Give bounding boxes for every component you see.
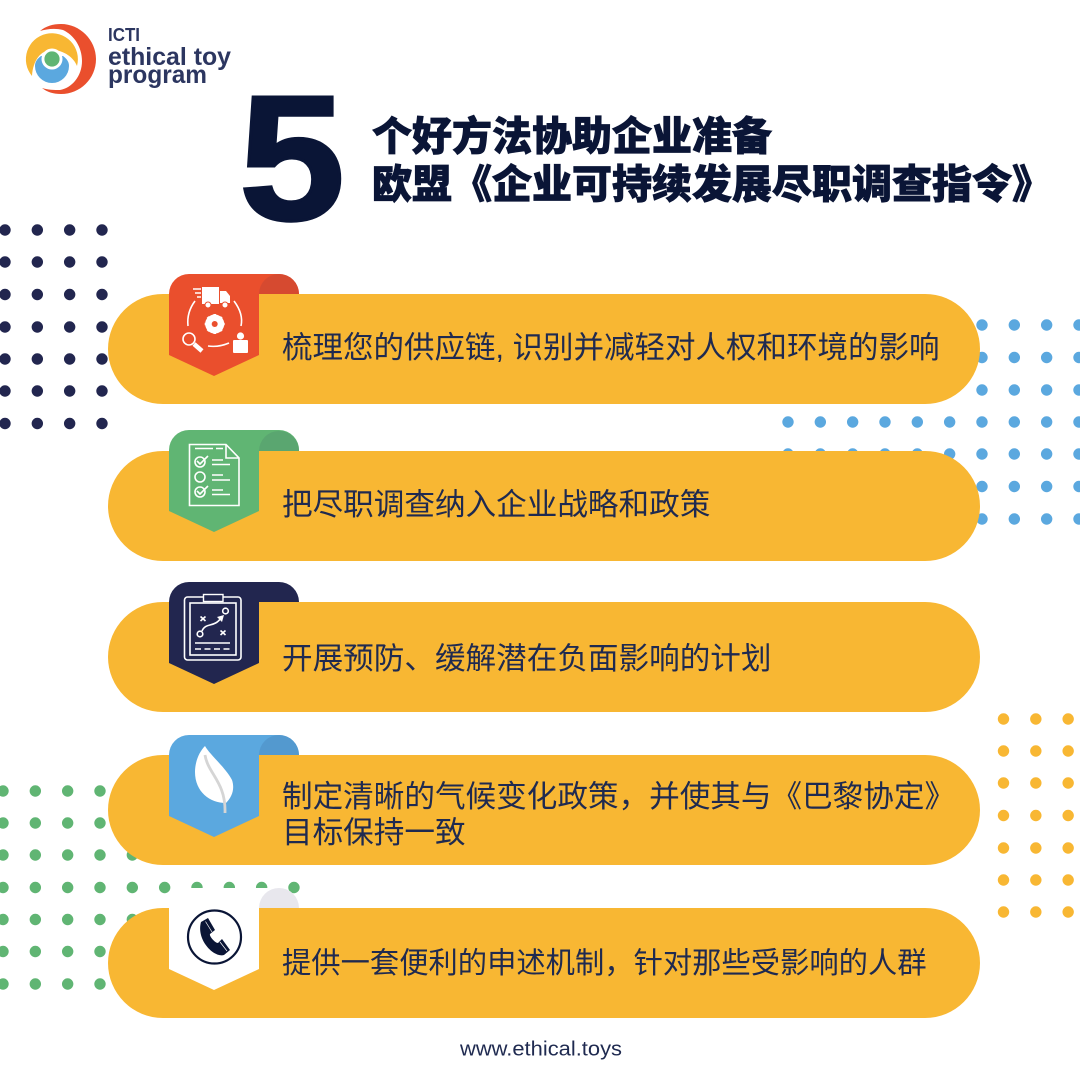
ribbon 4	[169, 735, 259, 837]
title	[372, 114, 1052, 207]
panel 4: climate policy	[108, 735, 980, 865]
icon: supply chain cycle	[183, 287, 248, 353]
pill 1	[108, 294, 980, 404]
ribbon 1	[169, 274, 259, 376]
ribbon fold 4	[240, 735, 299, 755]
text 3: 开展预防、缓解潜在负面影响的计划	[282, 642, 772, 676]
ribbon 2	[169, 430, 259, 532]
logo mark	[26, 24, 96, 94]
pill 5	[108, 908, 980, 1018]
panel 5: grievance mechanism	[108, 888, 980, 1018]
ribbon fold 2	[240, 430, 299, 451]
text 2: 把尽职调查纳入企业战略和政策	[282, 488, 710, 522]
text 4	[282, 780, 955, 850]
icon: phone	[188, 910, 241, 964]
ribbon 5	[169, 888, 259, 990]
text 4: 制定清晰的气候变化政策，并使其与《巴黎协定》	[282, 780, 955, 814]
text 5: 提供一套便利的申述机制，针对那些受影响的人群	[282, 947, 927, 980]
icon: leaf	[195, 746, 233, 813]
icon: clipboard strategy	[184, 594, 241, 660]
panel 3: prevention plan	[108, 582, 980, 712]
pill 3	[108, 602, 980, 712]
dot field: blue	[788, 325, 1080, 519]
dot field: orange	[1004, 719, 1075, 912]
footer url: www.ethical.toys	[459, 1038, 622, 1060]
text 1: 梳理您的供应链, 识别并减轻对人权和环境的影响	[282, 331, 939, 365]
logo: ICTI ethical toy program	[26, 24, 231, 94]
pill 4	[108, 755, 980, 865]
ribbon 3	[169, 582, 259, 684]
ribbon fold 3	[240, 582, 299, 602]
panel 2: due diligence	[108, 430, 980, 561]
text 4: 目标保持一致	[282, 816, 466, 850]
title: 欧盟《企业可持续发展尽职调查指令》	[372, 163, 1052, 207]
big number 5: 5	[239, 59, 345, 258]
icon: checklist	[190, 444, 239, 506]
logo wordmark: program	[108, 61, 207, 89]
ribbon fold 5	[240, 888, 299, 908]
logo wordmark: ethical toy	[108, 43, 231, 71]
logo wordmark	[108, 25, 231, 89]
dot field: green	[3, 791, 300, 984]
logo wordmark: ICTI	[108, 25, 140, 45]
pill 2	[108, 451, 980, 561]
dot field: navy	[5, 230, 110, 424]
title: 个好方法协助企业准备	[372, 114, 772, 159]
panel 1: supply chain	[108, 274, 980, 404]
ribbon fold 1	[240, 274, 299, 294]
